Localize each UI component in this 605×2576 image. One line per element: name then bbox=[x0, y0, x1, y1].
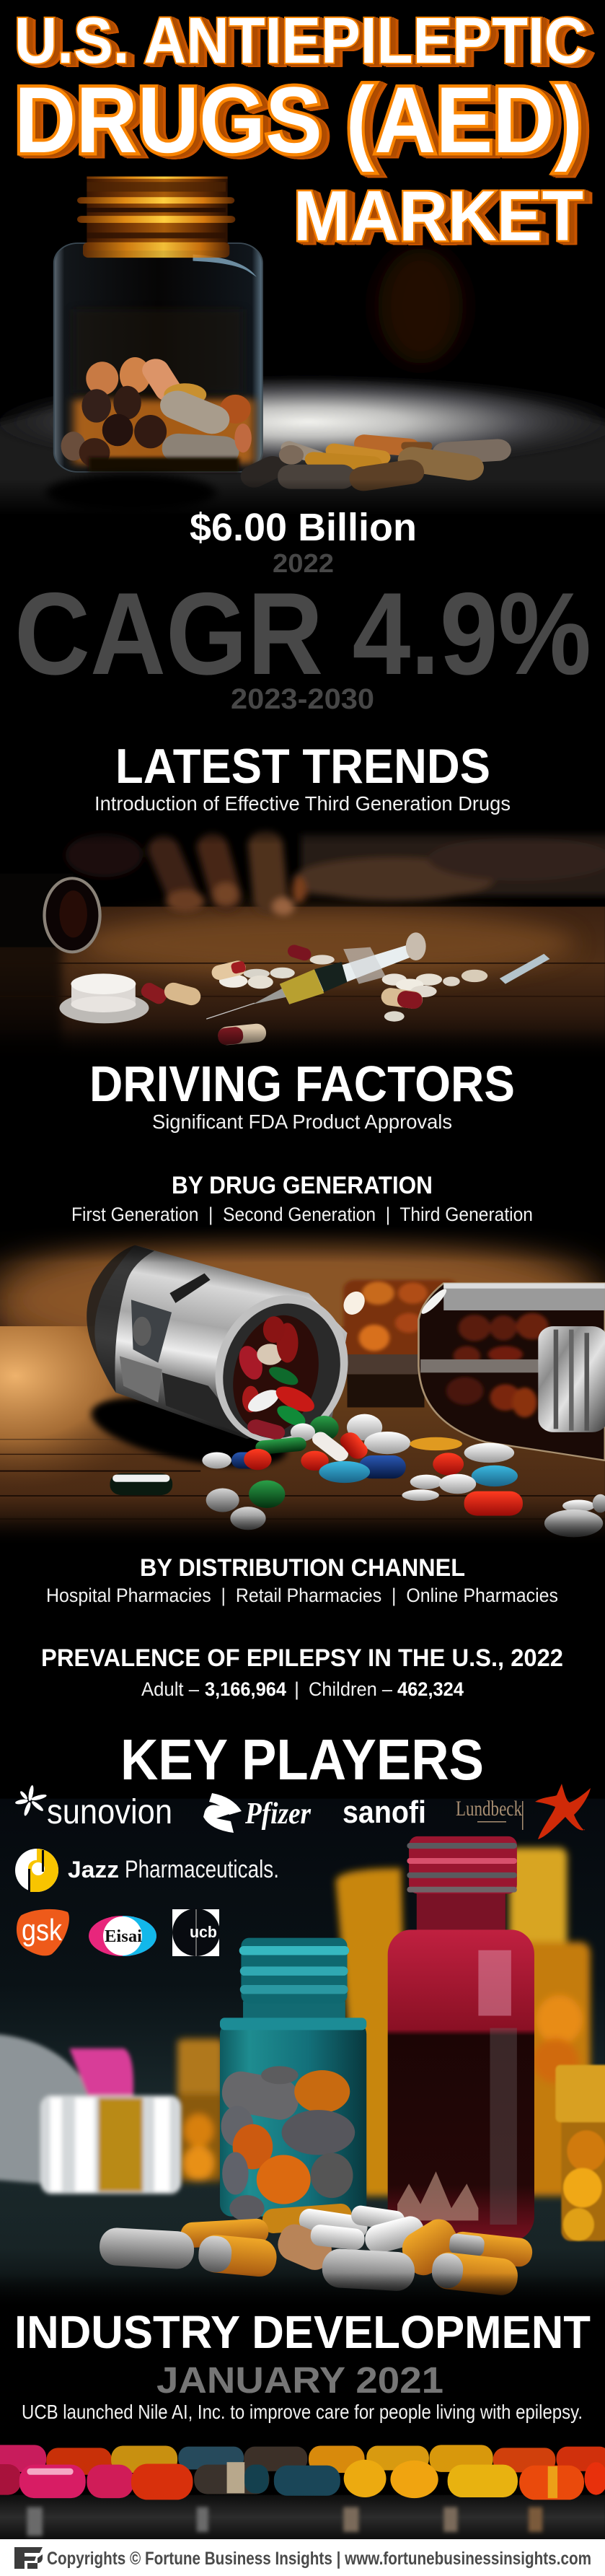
driver text: Significant FDA Product Approvals bbox=[152, 1110, 452, 1133]
logo: eisai bbox=[89, 1916, 156, 1956]
prevalence figures bbox=[141, 1678, 464, 1700]
heading: by drug generation: BY DRUG GENERATION bbox=[172, 1172, 433, 1199]
bottle shadow bbox=[84, 1384, 294, 1481]
photo 2 fades bbox=[0, 714, 605, 1061]
bottle base shadow bbox=[46, 473, 216, 512]
heading: key players: KEY PLAYERS bbox=[120, 1727, 484, 1792]
logo: lundbeck: Lundbeck bbox=[456, 1797, 522, 1821]
heading: by distribution channel: BY DISTRIBUTION CHANNEL bbox=[140, 1554, 465, 1582]
logo: red star bbox=[535, 1784, 591, 1839]
capsule pile bbox=[99, 2203, 534, 2297]
silver pill bottle bbox=[87, 1245, 361, 1453]
red bottle bbox=[388, 1836, 534, 2241]
spilled pills bbox=[110, 1414, 605, 1537]
scattered pills bbox=[138, 943, 549, 1046]
back capsule row bbox=[0, 2445, 605, 2475]
market value: $6.00 Billion bbox=[190, 506, 417, 549]
backdrop bbox=[0, 1799, 605, 2327]
footer logo bbox=[14, 2547, 43, 2569]
hands bbox=[66, 828, 605, 916]
title bbox=[14, 5, 587, 255]
lit floor bbox=[0, 374, 605, 673]
syringe bbox=[206, 932, 426, 1019]
heading: industry development: INDUSTRY DEVELOPMENT bbox=[14, 2306, 591, 2358]
photo: amber pill bottle with capsules bbox=[0, 177, 605, 673]
logo: eisai: Eisai bbox=[105, 1927, 142, 1946]
photo: hands, syringe and pills on table bbox=[0, 828, 605, 1061]
blurred yellow bottles bbox=[177, 1848, 591, 2196]
trend text: Introduction of Effective Third Generation Drugs bbox=[94, 792, 511, 815]
development date: JANUARY 2021 bbox=[156, 2360, 443, 2401]
distribution segments: Hospital Pharmacies | Retail Pharmacies | Online Pharmacies bbox=[46, 1585, 558, 1606]
background glow bbox=[0, 1224, 605, 1399]
logos bbox=[15, 1784, 591, 1956]
prevalence figures: 3,166,964 bbox=[205, 1678, 286, 1700]
logo: ucb bbox=[172, 1909, 220, 1956]
bottle cap bbox=[59, 973, 149, 1023]
logo: lundbeck bbox=[456, 1797, 524, 1830]
blurred brown bottle bbox=[340, 1280, 459, 1407]
teal bottle bbox=[220, 1938, 366, 2217]
logo: pfizer bbox=[203, 1793, 312, 1833]
logo: sunovion bbox=[15, 1785, 172, 1831]
logo: pfizer: Pfizer bbox=[244, 1797, 312, 1831]
photo fade bbox=[0, 479, 605, 515]
logo: gsk: gsk bbox=[22, 1913, 63, 1947]
title line 3: MARKET bbox=[293, 176, 583, 255]
logo: sunovion: sunovion bbox=[47, 1793, 172, 1831]
photo: spilled pill bottle on wooden table bbox=[0, 1224, 605, 1545]
spilled capsules bbox=[236, 434, 512, 493]
capsules inside bottle bbox=[61, 355, 255, 472]
photo 3 fades bbox=[0, 1061, 605, 1609]
photo: row of colourful capsules with reflections bbox=[0, 2445, 605, 2539]
logo: jazz pharmaceuticals: Jazz bbox=[68, 1857, 119, 1883]
bottle body bbox=[54, 243, 262, 472]
amber bottle right bbox=[555, 2065, 605, 2241]
table reflection bbox=[0, 2495, 605, 2539]
front capsule row bbox=[0, 2460, 605, 2500]
logo: ucb: ucb bbox=[190, 1923, 217, 1941]
photo 4 fade bbox=[0, 2273, 605, 2428]
table bbox=[0, 907, 605, 1061]
logo: gsk bbox=[17, 1909, 69, 1955]
tipped bottle bbox=[0, 874, 100, 952]
white bottle on side bbox=[0, 2034, 181, 2194]
amber neck bbox=[77, 177, 235, 258]
prevalence figures: 462,324 bbox=[397, 1678, 464, 1700]
capsules in teal bottle bbox=[219, 2066, 355, 2221]
value year: 2022 bbox=[273, 548, 334, 578]
footer bar bbox=[0, 2539, 605, 2576]
logo: jazz pharmaceuticals: Pharmaceuticals. bbox=[125, 1856, 279, 1883]
drug generation segments: First Generation | Second Generation | Third Generation bbox=[71, 1204, 533, 1225]
right glass bottle bbox=[418, 1283, 605, 1460]
photo: coloured medicine bottles and capsules bbox=[0, 1799, 605, 2327]
logo: sanofi: sanofi bbox=[343, 1795, 426, 1830]
heading: prevalence: PREVALENCE OF EPILEPSY IN THE U.S., 2022 bbox=[41, 1644, 563, 1672]
prevalence figures: Children – bbox=[309, 1678, 392, 1700]
heading: latest trends: LATEST TRENDS bbox=[115, 739, 490, 794]
table surface bbox=[0, 1326, 605, 1534]
faint red glow behind bbox=[378, 248, 463, 364]
heading: driving factors: DRIVING FACTORS bbox=[89, 1056, 515, 1112]
prevalence figures: Adult – bbox=[141, 1678, 199, 1700]
prevalence figures: | bbox=[294, 1678, 299, 1700]
forecast period: 2023-2030 bbox=[231, 683, 374, 715]
logo: jazz pharmaceuticals bbox=[15, 1849, 279, 1892]
